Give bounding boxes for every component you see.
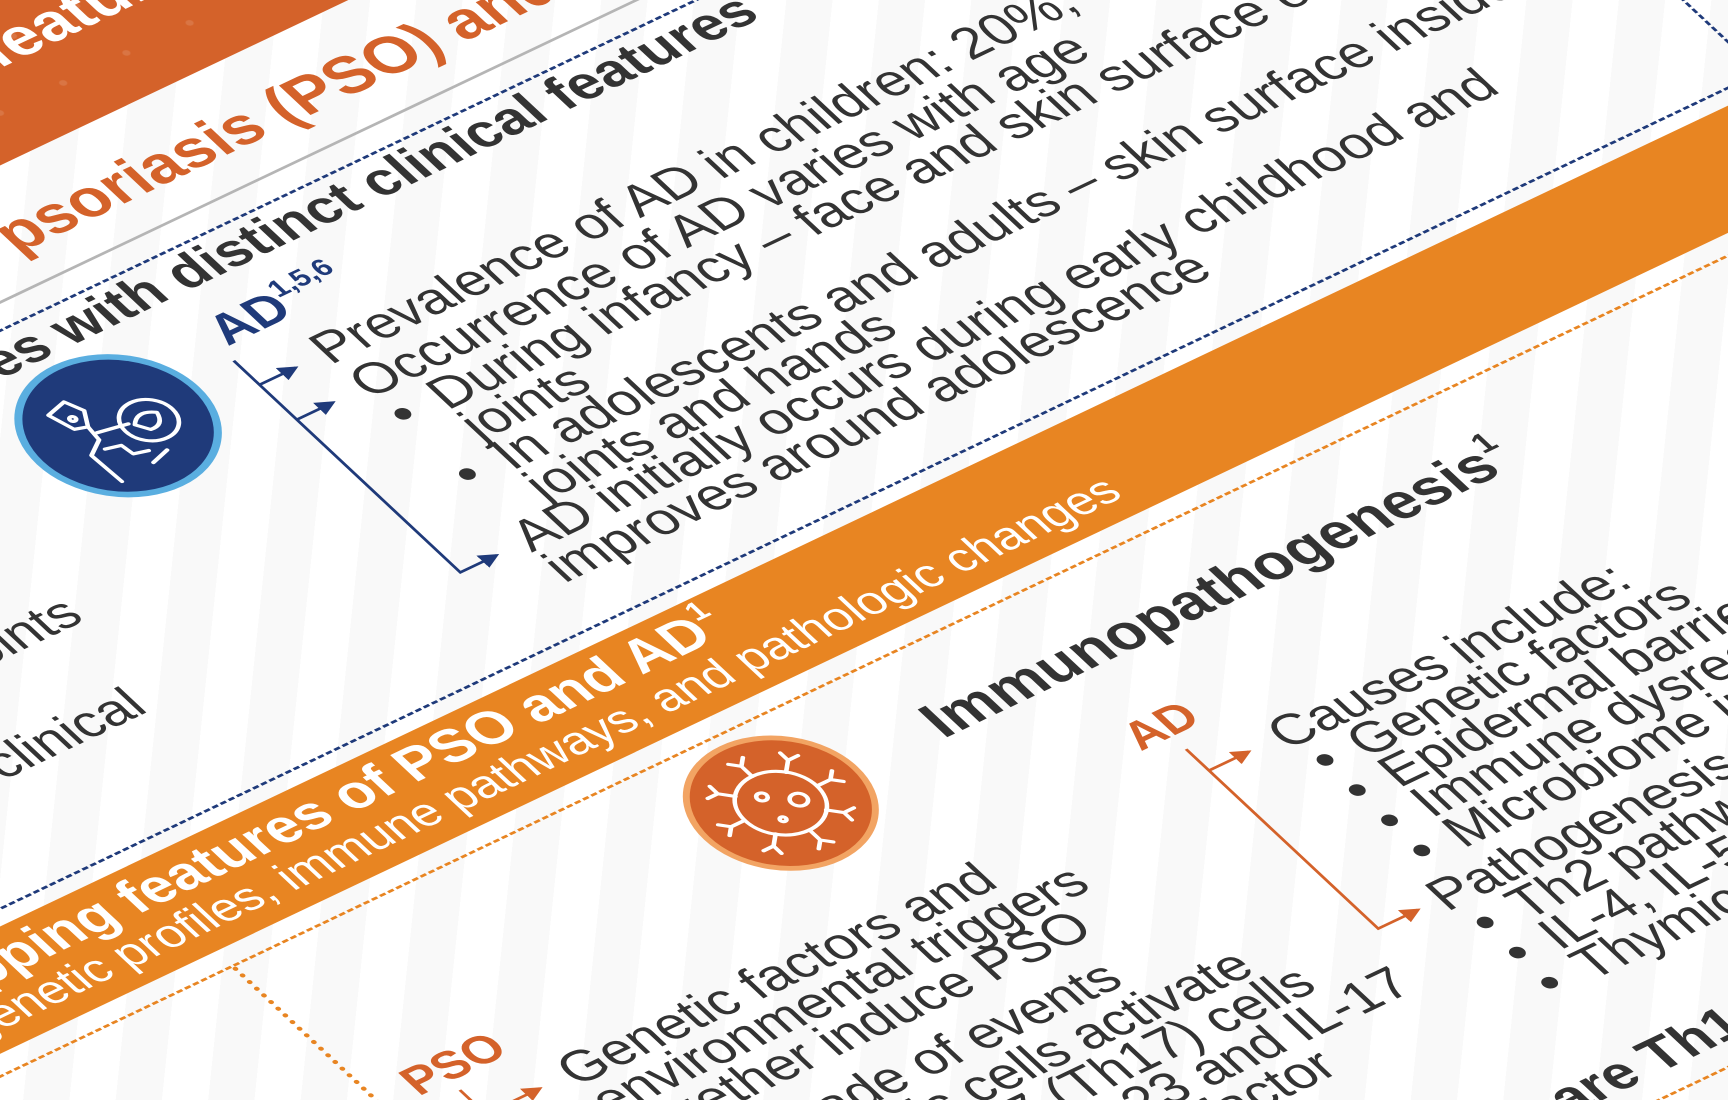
band heading white text [0,0,783,184]
bottom orange dashed line [215,412,1728,1100]
AD clinical features list: Occurrence of AD varies with age [336,23,1102,407]
AD pathogenesis list: • [1327,766,1387,814]
AD clinical features list: improves around adolescence [530,242,1224,591]
AD pathogenesis list: Genetic factors [1333,570,1704,766]
AD clinical features list: • [373,390,433,438]
icon: orange cell circle [643,710,919,897]
icon: blue circle with person [0,327,264,525]
AD pathogenesis list: • [1455,898,1515,946]
arrow: orange PSO bracket [460,1064,652,1100]
AD pathogenesis list: • [1392,826,1452,875]
AD clinical features list: joints and hands [511,301,909,510]
top orange title band [0,0,1728,643]
AD pathogenesis list: • [1359,796,1420,844]
arrow: blue AD bracket [234,344,496,572]
AD pathogenesis list: • [1487,928,1547,977]
main title orange [0,0,940,617]
AD label blue: AD1,5,6 [195,254,341,354]
heading: immunopathogenesis: Immunopathogenesis1 [905,426,1513,748]
AD pathogenesis list: Causes include: [1254,553,1644,758]
gray separator line [0,0,1728,735]
arrow: orange AD bracket [1186,730,1418,929]
AD label orange: AD [1111,693,1211,759]
PSO pathogenesis list: Genetic factors and [543,854,1009,1095]
AD clinical features list: AD initially occurs during early childhood and [497,59,1511,561]
AD clinical features list: joints [446,355,603,449]
band subtitle: enetic profiles, immune pathways, and pathologic changes [0,468,1132,1037]
band title [0,596,725,1073]
AD pathogenesis list: • [1520,958,1580,1007]
vertical dotted divider [231,966,953,1100]
band title: features of PSO and AD1 [101,596,725,923]
AD clinical features list: • [437,450,497,498]
heading: distinct clinical features [0,0,771,663]
AD pathogenesis list: • [1295,736,1355,784]
bottom bold statement [1035,748,1728,1100]
